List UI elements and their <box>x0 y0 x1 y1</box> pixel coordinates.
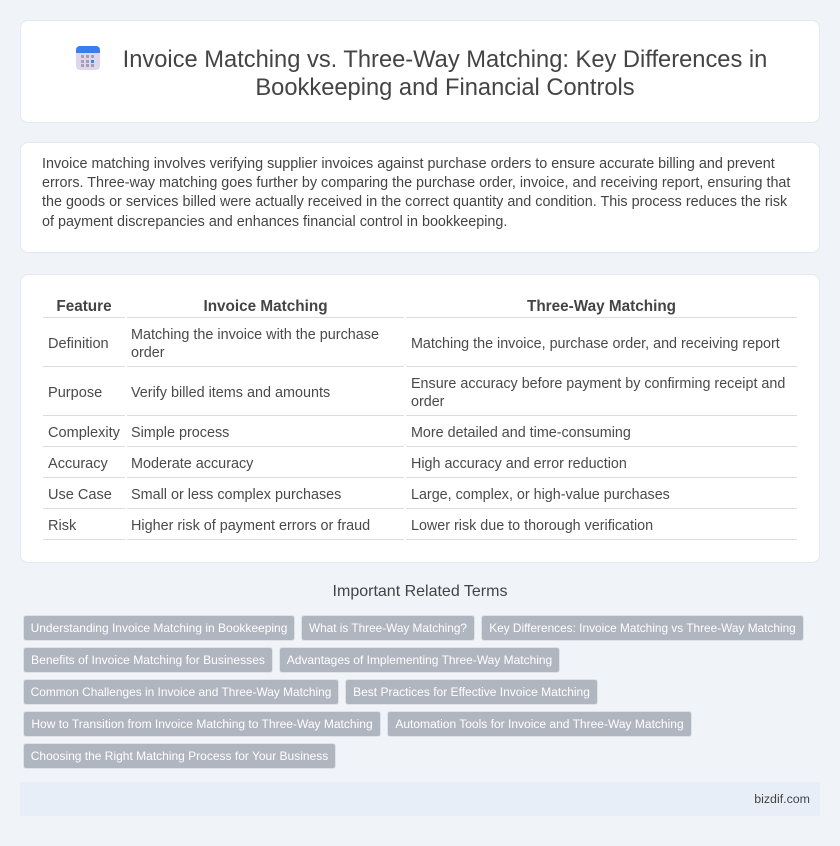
table panel <box>20 274 820 563</box>
comparison table: Verify billed items and amounts <box>131 385 330 401</box>
related terms chips <box>23 615 804 769</box>
intro text: errors. Three-way matching goes further by comparing the purchase order, invoice, and receiving report, ensuring that <box>42 175 790 191</box>
title: Invoice Matching vs. Three-Way Matching: Key Differences in <box>123 47 767 73</box>
related terms chips: Understanding Invoice Matching in Bookkeeping <box>31 621 287 635</box>
related terms chips: Choosing the Right Matching Process for Your Business <box>31 749 328 763</box>
intro text <box>42 156 790 230</box>
related terms chips: Benefits of Invoice Matching for Businesses <box>31 653 265 667</box>
comparison table: Use Case <box>48 487 112 503</box>
comparison table: Three-Way Matching <box>527 298 676 315</box>
footer source: bizdif.com <box>754 792 810 806</box>
comparison table: Feature <box>56 298 112 315</box>
related terms chips: Best Practices for Effective Invoice Matching <box>353 685 590 699</box>
comparison table: Invoice Matching <box>203 298 328 315</box>
intro text: Invoice matching involves verifying supplier invoices against purchase orders to ensure accurate billing and prevent <box>42 156 775 172</box>
footer bar <box>20 782 820 816</box>
header panel <box>20 20 820 123</box>
comparison table: Small or less complex purchases <box>131 487 341 503</box>
comparison table: Risk <box>48 518 76 534</box>
comparison table: High accuracy and error reduction <box>411 456 627 472</box>
related terms chips: Common Challenges in Invoice and Three-Way Matching <box>31 685 331 699</box>
related terms heading: Important Related Terms <box>333 583 507 600</box>
icon: calendar <box>76 46 100 70</box>
intro text: of payment discrepancies and enhances financial control in bookkeeping. <box>42 214 507 230</box>
comparison table: More detailed and time-consuming <box>411 425 631 441</box>
comparison table: order <box>131 345 165 361</box>
comparison table: Matching the invoice, purchase order, and receiving report <box>411 336 780 352</box>
comparison table: Moderate accuracy <box>131 456 253 472</box>
comparison table: Matching the invoice with the purchase <box>131 327 379 343</box>
comparison table <box>43 298 797 540</box>
comparison table: Lower risk due to thorough verification <box>411 518 653 534</box>
comparison table: Complexity <box>48 425 120 441</box>
comparison table: Higher risk of payment errors or fraud <box>131 518 370 534</box>
related terms chips: Key Differences: Invoice Matching vs Three-Way Matching <box>489 621 796 635</box>
comparison table: Ensure accuracy before payment by confirming receipt and <box>411 376 785 392</box>
related terms chips: How to Transition from Invoice Matching to Three-Way Matching <box>31 717 373 731</box>
comparison table: Large, complex, or high-value purchases <box>411 487 670 503</box>
intro text: the goods or services billed were actually received in the correct quantity and condition. This process reduces the risk <box>42 194 787 210</box>
comparison table: Definition <box>48 336 109 352</box>
intro panel <box>20 142 820 253</box>
comparison table: Accuracy <box>48 456 108 472</box>
related terms chips: Advantages of Implementing Three-Way Matching <box>287 653 552 667</box>
related terms chips: What is Three-Way Matching? <box>309 621 467 635</box>
comparison table: order <box>411 394 444 410</box>
title: Bookkeeping and Financial Controls <box>255 75 635 101</box>
comparison table: Purpose <box>48 385 102 401</box>
title <box>123 47 767 101</box>
related terms chips: Automation Tools for Invoice and Three-Way Matching <box>395 717 684 731</box>
comparison table: Simple process <box>131 425 229 441</box>
